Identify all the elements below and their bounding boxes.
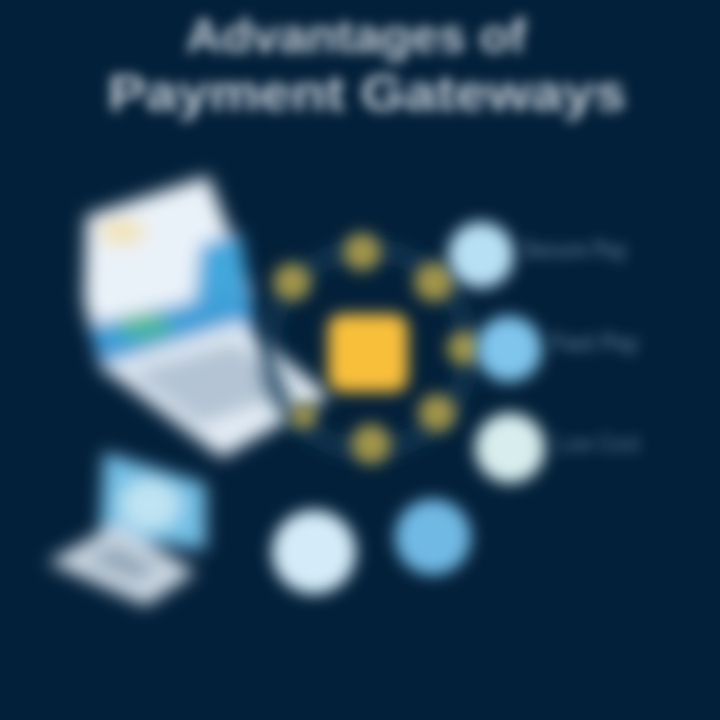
title: [108, 9, 626, 121]
benefit 2 label: Fast Pay: [551, 327, 639, 357]
laptop keyboard base: [100, 322, 330, 458]
network hub: [268, 233, 481, 464]
benefit 2 circle: [476, 316, 542, 382]
laptop screen: [84, 176, 252, 366]
small laptop base: [48, 524, 196, 606]
benefit 3 label: Low Cost: [556, 428, 640, 458]
benefit 3 circle: [475, 413, 545, 483]
connection ring: [268, 250, 468, 450]
benefit item 3: [475, 413, 640, 483]
benefit 1 label: Secure Pay: [523, 234, 627, 264]
title: Payment Gateways: [108, 65, 626, 121]
small laptop screen: [100, 452, 206, 550]
ring nodes: [273, 233, 481, 464]
title: Advantages of: [186, 9, 526, 62]
large laptop illustration: [84, 176, 330, 458]
central padlock icon: [328, 314, 408, 392]
benefit item 1: [448, 222, 627, 288]
benefit circle 5: [395, 499, 471, 575]
benefit 1 circle: [448, 222, 514, 288]
benefit item 2: [476, 316, 639, 382]
small laptop illustration: [48, 452, 206, 606]
benefit circle 4: [272, 510, 356, 594]
